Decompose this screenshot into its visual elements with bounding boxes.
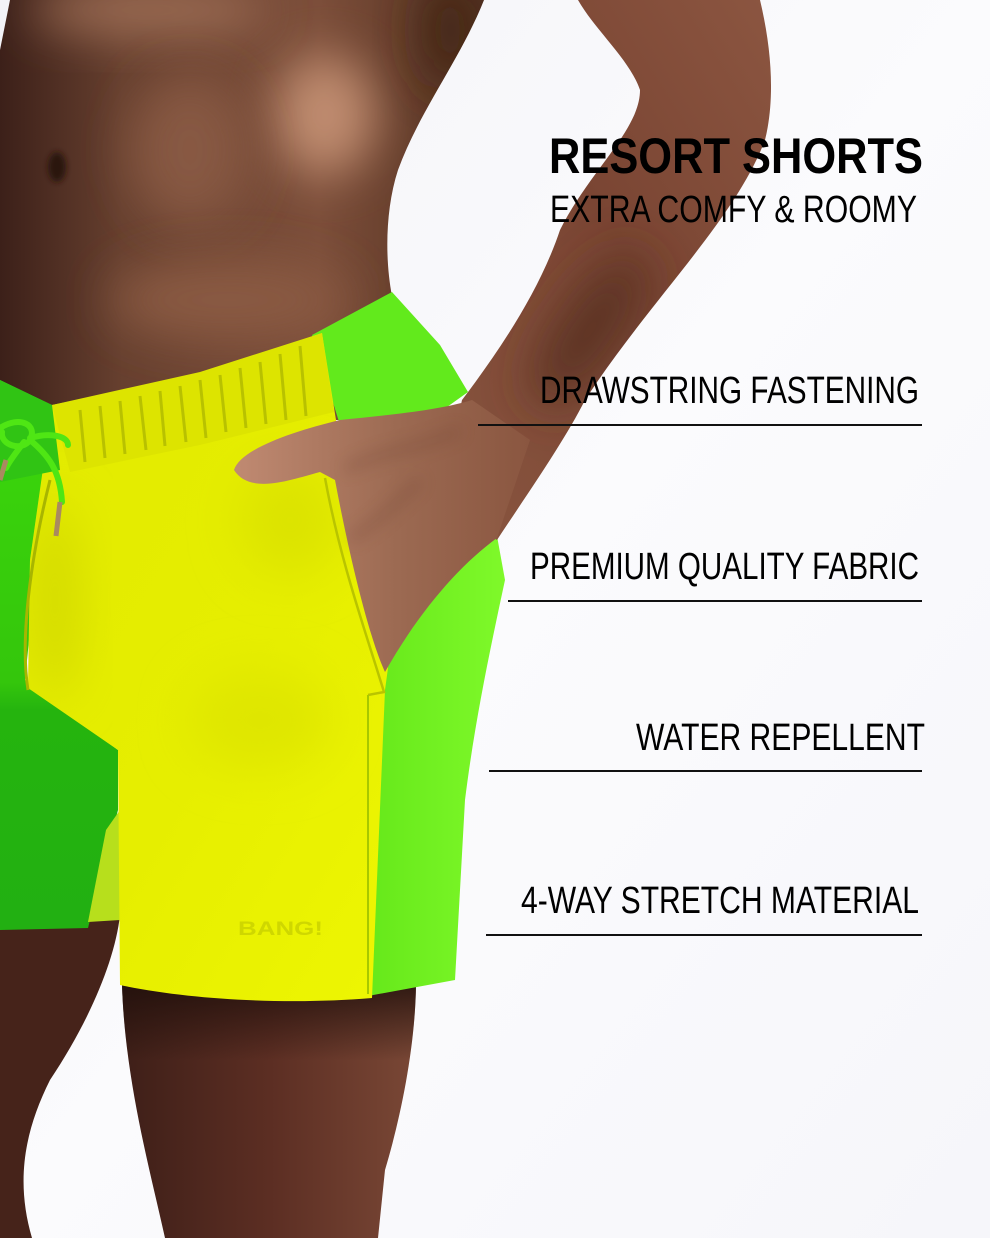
hand in pocket [234, 400, 530, 672]
hand shading [345, 430, 460, 540]
arm shading [514, 239, 666, 421]
shorts: upper side green panel [312, 292, 468, 425]
navel [48, 152, 66, 182]
front leg [120, 985, 420, 1238]
torso [0, 0, 490, 420]
waistband [52, 333, 334, 472]
pocket seam [325, 478, 384, 695]
side seam [367, 695, 369, 994]
rear leg [0, 915, 120, 1238]
drawstring tips [0, 460, 60, 536]
fly seam [25, 480, 50, 690]
shorts: dark green front panel [0, 380, 118, 930]
arm [461, 0, 771, 540]
heading: RESORT SHORTS [549, 128, 923, 184]
green waistband [0, 380, 60, 482]
fabric shadows [33, 500, 77, 700]
logo: BANG! [238, 919, 323, 940]
waistband gathers [80, 346, 306, 462]
photo: model wearing shorts [0, 0, 780, 1238]
shorts: yellow inner sliver [88, 810, 120, 922]
torso shading [30, 0, 480, 340]
shorts: lower green side panel [368, 536, 505, 996]
shorts: yellow main panel [28, 333, 388, 1002]
drawstring [0, 422, 68, 502]
